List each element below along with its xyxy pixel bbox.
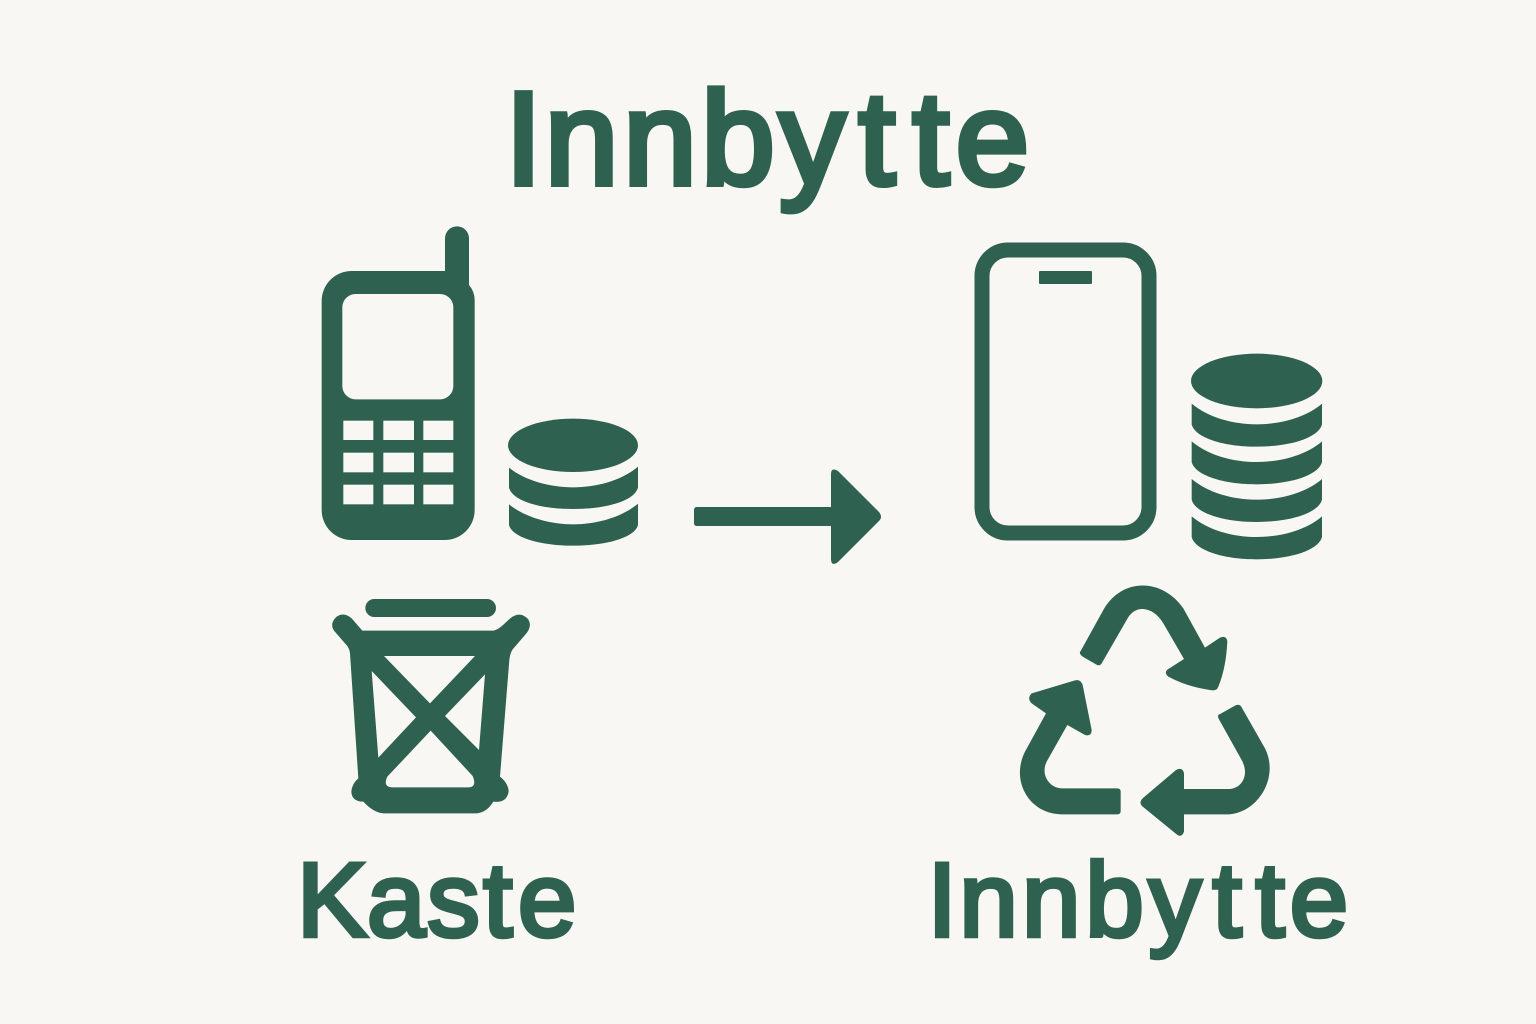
label: Innbytte: Innbytte (928, 842, 1348, 959)
arrow (694, 470, 881, 564)
top arrow (1080, 586, 1227, 690)
icon: small coin stack (508, 419, 638, 546)
icon: old keypad phone (322, 226, 475, 540)
label: Kaste: Kaste (297, 842, 576, 959)
title: Innbytte (505, 65, 1029, 212)
right arrow (1140, 705, 1270, 836)
icon: large coin stack (1191, 354, 1322, 559)
icon: crossed-out trash bin (332, 599, 530, 813)
icon: smartphone (982, 250, 1149, 533)
left arrow (1020, 680, 1121, 814)
icon: recycling symbol (1020, 586, 1270, 836)
